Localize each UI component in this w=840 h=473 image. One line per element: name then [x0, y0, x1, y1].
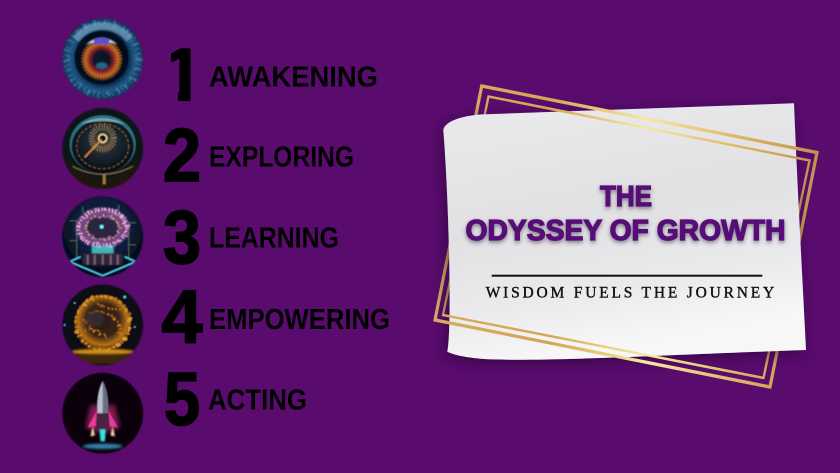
number 5: 5	[164, 357, 200, 441]
title	[466, 181, 786, 247]
title: ODYSSEY OF GROWTH	[466, 215, 786, 247]
divider line	[492, 275, 762, 277]
gold frame: front edges	[435, 86, 817, 387]
icon: compass gauge	[62, 108, 143, 190]
number 4: 4	[162, 274, 203, 358]
subtitle: WISDOM FUELS THE JOURNEY	[486, 284, 774, 302]
label: acting: ACTING	[208, 384, 307, 416]
number 1: 1	[160, 32, 208, 116]
label: awakening: AWAKENING	[209, 62, 378, 94]
icon: circuit brain	[62, 196, 143, 277]
label: exploring: EXPLORING	[209, 142, 354, 174]
gold frame: back sides	[435, 86, 817, 387]
icon: eye	[62, 18, 143, 99]
icon: glowing sphere	[62, 284, 143, 366]
paper sheet	[443, 103, 806, 360]
panel: title card	[435, 86, 817, 387]
icon: rocket	[62, 373, 143, 454]
number 2: 2	[163, 113, 201, 197]
list: five growth stages	[62, 18, 390, 454]
label: learning: LEARNING	[209, 222, 339, 254]
title: THE	[600, 181, 652, 213]
label: empowering: EMPOWERING	[209, 304, 390, 336]
number 3: 3	[163, 195, 201, 279]
